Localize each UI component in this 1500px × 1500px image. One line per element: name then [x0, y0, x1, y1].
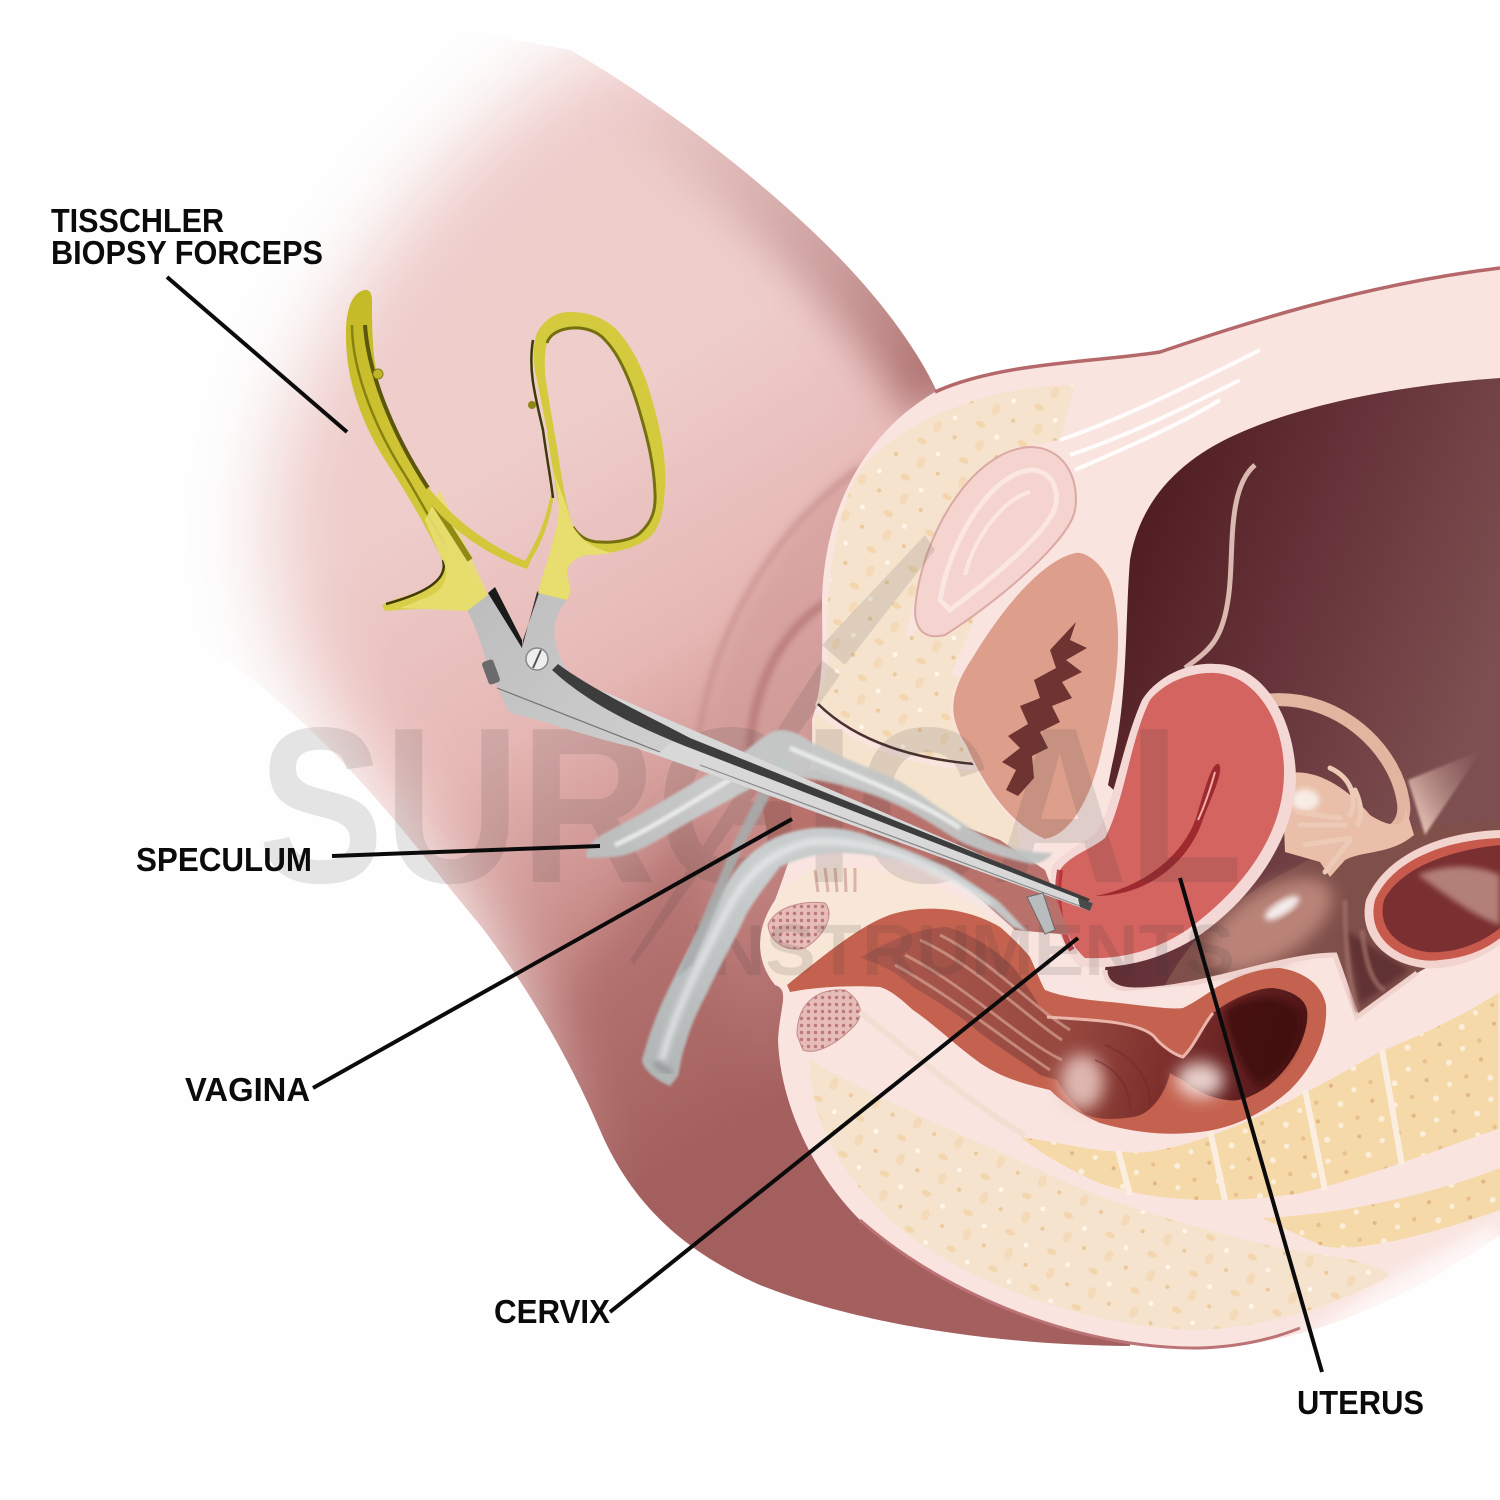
bladder inner fold [1002, 622, 1087, 796]
label: uterus [1180, 878, 1424, 1421]
section outline: lower contour [860, 1220, 1300, 1348]
lower sacral strip [1262, 1168, 1500, 1248]
endometrial cavity [1095, 764, 1220, 896]
label: cervix [494, 938, 1078, 1330]
watermark [258, 535, 1243, 991]
sacrum vertebrae [1015, 990, 1500, 1202]
rectal lumen highlights [1176, 1062, 1224, 1098]
buttock fat [810, 1060, 1390, 1330]
colon cross-section [1365, 830, 1500, 968]
forceps left gold handle [346, 290, 553, 611]
lumen [860, 927, 1307, 1119]
speculum upper blade [586, 730, 1053, 864]
label: vagina: VAGINA [185, 1071, 310, 1108]
abdominal wall fat [827, 385, 1075, 700]
speculum stem [677, 758, 790, 977]
forceps body [467, 587, 680, 752]
forceps shaft [510, 690, 1093, 934]
biopsy forceps [346, 290, 1093, 934]
section outline: top contour [935, 268, 1500, 392]
forceps dark upper stripe [552, 664, 1090, 902]
label: Tisschler biopsy forceps: TISSCHLER [51, 202, 224, 239]
label: speculum [136, 841, 600, 878]
spring leaf [424, 487, 530, 569]
thumb screw [481, 659, 501, 685]
ligament streaks [1060, 350, 1260, 470]
pivot screw [526, 648, 548, 670]
body skin: thigh and buttock [234, 44, 1130, 1346]
rectus muscle [915, 447, 1076, 636]
forceps jaw [1027, 893, 1055, 934]
bowel loop [1105, 820, 1500, 1017]
label: cervix: CERVIX [494, 1293, 610, 1330]
bladder [952, 552, 1119, 840]
label: uterus: UTERUS [1297, 1384, 1424, 1421]
vaginal canal [760, 770, 1070, 935]
cervix shading [1058, 870, 1072, 950]
pubic bone fat and line [812, 660, 1020, 850]
forceps right gold finger loop [528, 312, 665, 600]
peritoneal strand [1185, 465, 1255, 668]
fade at lower right of section [1290, 1220, 1500, 1345]
watermark: INSTRUMENTS [690, 911, 1235, 991]
label: vagina [185, 819, 792, 1108]
fold rim [1047, 1013, 1213, 1057]
label: Tisschler biopsy forceps [51, 202, 347, 432]
uterus [1050, 664, 1296, 967]
watermark: SURGICAL [258, 682, 1243, 930]
pale tissue under cervix [1030, 952, 1190, 1004]
label: Tisschler biopsy forceps: BIOPSY FORCEPS [51, 234, 323, 271]
label: speculum: SPECULUM [136, 841, 312, 878]
cross-section: pale tissue [760, 268, 1500, 1348]
vaginal and rectal walls [787, 907, 1326, 1134]
peritoneal cavity [1105, 378, 1500, 1017]
speculum [586, 730, 1053, 1086]
vaginal orifice fold and glands [760, 867, 1030, 1135]
ovary and fallopian tube [1270, 700, 1482, 877]
speculum lower blade [642, 828, 1030, 1086]
